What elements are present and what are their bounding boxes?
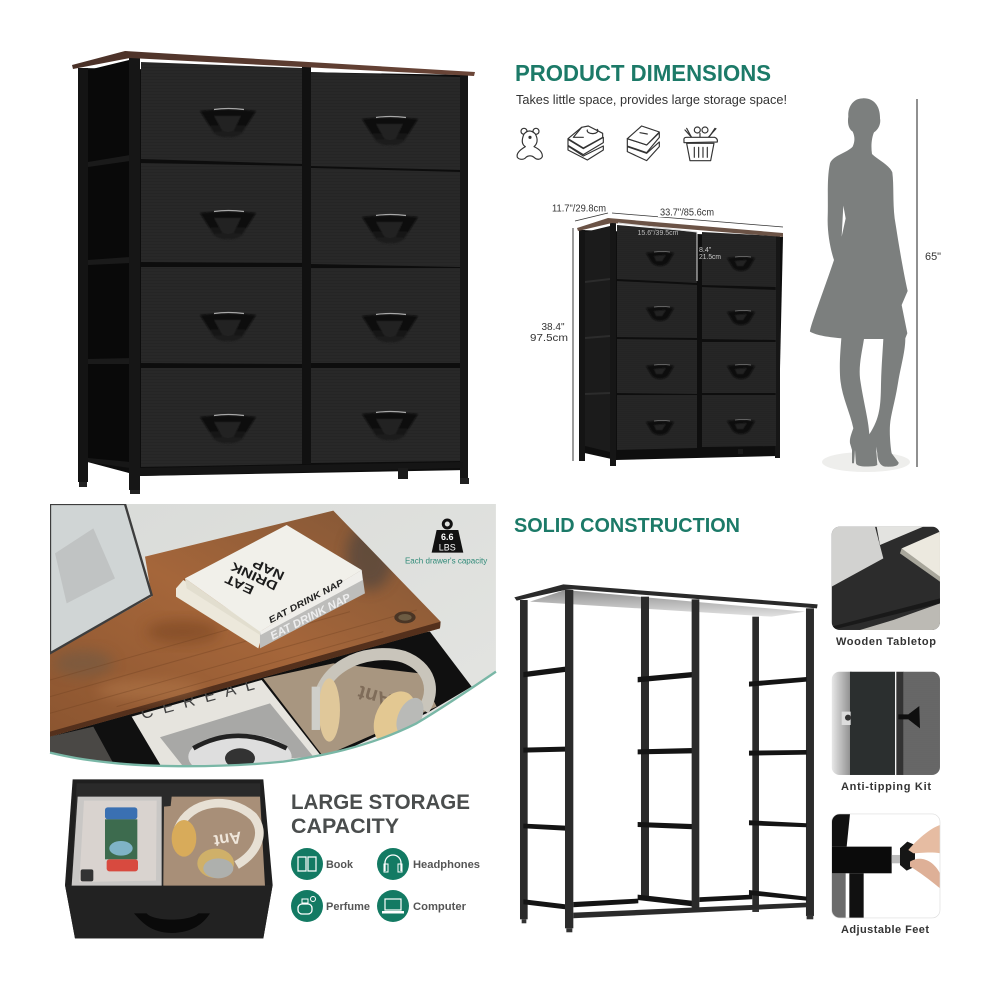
weight capacity badge bbox=[405, 520, 488, 565]
dimension lines and labels bbox=[530, 204, 783, 461]
weight capacity badge: LBS bbox=[439, 542, 456, 552]
cereal magazine: CEREAL bbox=[139, 675, 256, 723]
wooden tabletop bbox=[50, 511, 441, 737]
dimension: height: 97.5cm bbox=[530, 333, 568, 344]
stacked books: DRINK bbox=[228, 559, 280, 593]
dimension: width bbox=[612, 206, 783, 227]
dimension: height: 38.4" bbox=[541, 322, 565, 333]
item: headphones bbox=[377, 848, 480, 880]
dimension: depth bbox=[552, 204, 608, 221]
brown book in drawer: Ant bbox=[355, 681, 395, 712]
icon: folded shirts bbox=[568, 126, 603, 160]
subtitle: Takes little space, provides large storage space! bbox=[516, 92, 787, 107]
stacked books bbox=[176, 525, 365, 648]
main dresser product photo bbox=[72, 51, 475, 494]
item: computer bbox=[377, 890, 467, 922]
item: book bbox=[291, 848, 354, 880]
book with headphones: Ant bbox=[212, 828, 243, 850]
open drawer cutaway illustration bbox=[65, 779, 273, 938]
item: book: Book bbox=[326, 859, 354, 871]
open drawer interior bbox=[50, 632, 472, 767]
icon: basket bbox=[684, 127, 717, 161]
icon: folded towels bbox=[627, 126, 659, 161]
curved teal edge bbox=[50, 672, 496, 766]
stacked books: NAP bbox=[250, 556, 287, 583]
stacked books: EAT DRINK NAP bbox=[269, 592, 353, 643]
stacked books: EAT bbox=[223, 571, 256, 597]
brown book in drawer bbox=[263, 663, 437, 757]
metal frame illustration bbox=[514, 584, 818, 932]
icon row: stored items bbox=[517, 126, 717, 161]
heading: product dimensions: PRODUCT DIMENSIONS bbox=[515, 60, 771, 86]
dimension: depth: 11.7"/29.8cm bbox=[552, 204, 606, 214]
dimension: width: 33.7"/85.6cm bbox=[660, 208, 714, 218]
drawer handle bbox=[134, 913, 210, 933]
item: computer: Computer bbox=[413, 901, 467, 913]
item: perfume bbox=[291, 890, 370, 922]
dimension: drawer height: 8.4" bbox=[699, 247, 712, 254]
icon: teddy bear bbox=[517, 128, 542, 159]
dimension: height bbox=[530, 228, 573, 461]
heading: large storage capacity bbox=[291, 791, 470, 838]
thumbnail: adjustable feet bbox=[832, 814, 940, 918]
weight capacity badge: 6.6 bbox=[441, 532, 454, 542]
stacked books: EAT DRINK NAP bbox=[267, 577, 345, 625]
label: wooden tabletop: Wooden Tabletop bbox=[836, 636, 936, 648]
headphones bbox=[312, 654, 430, 752]
thumbnail: anti-tipping kit bbox=[832, 672, 940, 775]
dimension: drawer width bbox=[618, 223, 697, 237]
item: perfume: Perfume bbox=[326, 901, 370, 913]
book with headphones bbox=[163, 797, 265, 886]
dimension: drawer height bbox=[697, 232, 721, 281]
infographic canvas bbox=[50, 51, 940, 938]
height line: 65 inches: 65" bbox=[925, 251, 941, 263]
item: headphones: Headphones bbox=[413, 859, 480, 871]
heading: large storage capacity: LARGE STORAGE bbox=[291, 791, 470, 814]
small dresser diagram bbox=[577, 218, 783, 466]
framed picture bbox=[50, 504, 152, 653]
weight capacity badge: Each drawer's capacity bbox=[405, 555, 488, 565]
label: adjustable feet: Adjustable Feet bbox=[841, 924, 929, 936]
dimension: drawer height: 21.5cm bbox=[699, 254, 721, 261]
human silhouette for scale bbox=[810, 98, 910, 472]
heading: large storage capacity: CAPACITY bbox=[291, 815, 399, 838]
heading: solid construction: SOLID CONSTRUCTION bbox=[514, 515, 740, 537]
dimension: drawer width: 15.6"/39.5cm bbox=[638, 230, 679, 237]
label: anti-tipping kit: Anti-tipping Kit bbox=[841, 781, 931, 793]
handheld game console bbox=[105, 807, 138, 871]
cereal magazine bbox=[132, 680, 320, 765]
thumbnail: wooden tabletop bbox=[832, 527, 940, 630]
tablet bbox=[72, 797, 162, 886]
photo panel: tabletop and open drawer bbox=[50, 500, 497, 779]
